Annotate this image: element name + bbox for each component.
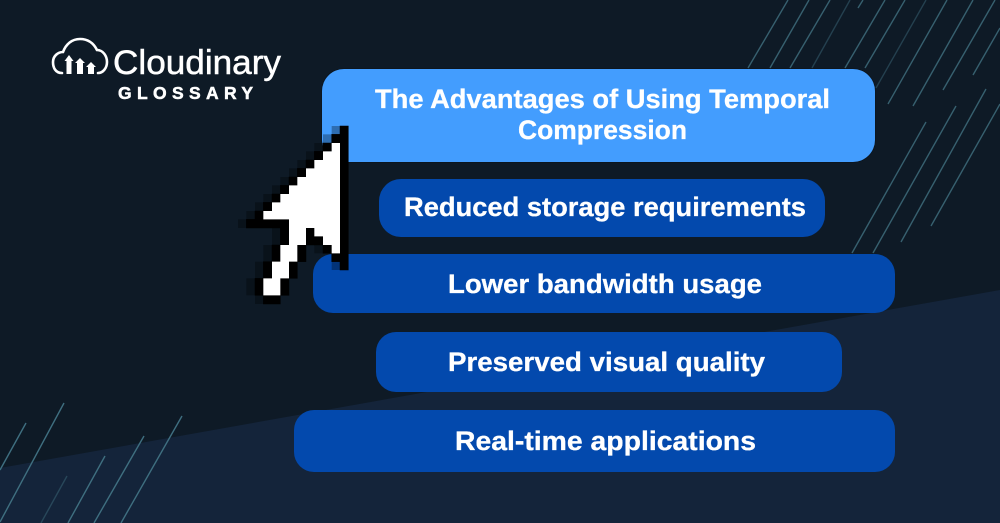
panel: real-time applications: Real-time applications xyxy=(455,426,756,456)
logo: Cloudinary Glossary xyxy=(53,39,281,103)
panel: lower bandwidth usage xyxy=(313,254,895,313)
panel: real-time applications xyxy=(294,410,895,472)
heading: The Advantages of Using Temporal xyxy=(375,84,830,114)
logo wordmark: Cloudinary xyxy=(113,44,281,82)
panel: preserved visual quality: Preserved visual quality xyxy=(448,347,765,377)
logo subtitle: GLOSSARY xyxy=(118,83,253,103)
cursor fill xyxy=(263,143,340,295)
panel: title xyxy=(322,68,876,162)
icon: cloud with arrows xyxy=(53,39,107,74)
panel: lower bandwidth usage: Lower bandwidth usage xyxy=(448,269,762,299)
panel: title: Compression xyxy=(518,115,687,145)
panel: reduced storage requirements xyxy=(379,179,825,237)
panel: reduced storage requirements: Reduced storage requirements xyxy=(404,192,806,222)
panel: preserved visual quality xyxy=(376,332,842,392)
icon: pixel cursor xyxy=(238,126,348,304)
